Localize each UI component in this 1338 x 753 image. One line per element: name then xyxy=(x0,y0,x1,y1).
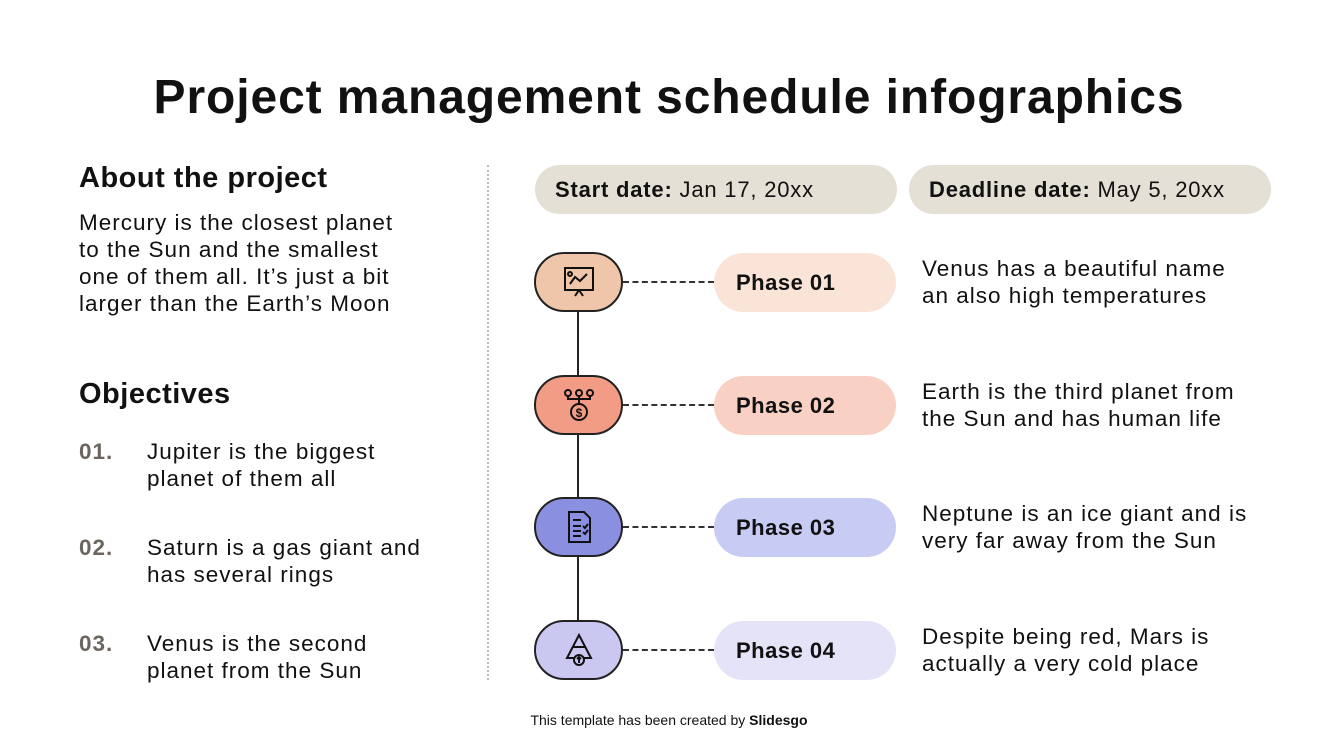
text: about: larger than the Earth’s Moon xyxy=(79,291,391,316)
objective 02: 02. xyxy=(79,535,113,560)
objective 03: 03. xyxy=(79,631,113,656)
description 01: Venus has a beautiful name xyxy=(922,256,1226,281)
phase 03: Phase 03 xyxy=(736,515,835,540)
phase 04: Phase 04 xyxy=(736,638,835,663)
description 02: Earth is the third planet from xyxy=(922,379,1235,404)
heading: about the project: About the project xyxy=(79,162,328,194)
phase 01 xyxy=(534,252,1226,312)
description 02 xyxy=(922,379,1235,431)
description 01 xyxy=(922,256,1226,308)
description 04 xyxy=(922,624,1209,676)
text: about: one of them all. It’s just a bit xyxy=(79,264,389,289)
description 03 xyxy=(922,501,1247,553)
description 04: actually a very cold place xyxy=(922,651,1199,676)
start date pill: Start date: Jan 17, 20xx xyxy=(555,177,814,202)
deadline date pill xyxy=(909,165,1271,214)
deadline date pill: Deadline date: May 5, 20xx xyxy=(929,177,1225,202)
objective 03 xyxy=(79,631,367,683)
objective 01: Jupiter is the biggest xyxy=(147,439,375,464)
objective 02 xyxy=(79,535,421,587)
heading: objectives: Objectives xyxy=(79,378,231,410)
objective 02: has several rings xyxy=(147,562,334,587)
text: about xyxy=(79,210,393,316)
objective 02: Saturn is a gas giant and xyxy=(147,535,421,560)
title: Project management schedule infographics xyxy=(154,71,1184,124)
icon: money funnel xyxy=(534,375,623,435)
text: about: Mercury is the closest planet xyxy=(79,210,393,235)
phase 02: Phase 02 xyxy=(736,393,835,418)
description 03: very far away from the Sun xyxy=(922,528,1217,553)
description 02: the Sun and has human life xyxy=(922,406,1222,431)
icon: checklist xyxy=(534,497,623,557)
phase 03 xyxy=(534,497,1247,557)
phase 02 xyxy=(534,375,1235,435)
timeline connector xyxy=(577,312,579,622)
objective 01: planet of them all xyxy=(147,466,336,491)
icon: presentation chart xyxy=(534,252,623,312)
objective 01 xyxy=(79,439,375,491)
description 01: an also high temperatures xyxy=(922,283,1207,308)
icon: pyramid xyxy=(534,620,623,680)
footer credit: This template has been created by Slidesgo xyxy=(530,712,808,728)
phase 01: Phase 01 xyxy=(736,270,835,295)
phase 04 xyxy=(534,620,1209,680)
description 03: Neptune is an ice giant and is xyxy=(922,501,1247,526)
objective 03: Venus is the second xyxy=(147,631,367,656)
start date pill xyxy=(535,165,897,214)
text: about: to the Sun and the smallest xyxy=(79,237,379,262)
objective 03: planet from the Sun xyxy=(147,658,362,683)
objective 01: 01. xyxy=(79,439,113,464)
description 04: Despite being red, Mars is xyxy=(922,624,1209,649)
icon: money funnel: $ xyxy=(575,406,582,420)
